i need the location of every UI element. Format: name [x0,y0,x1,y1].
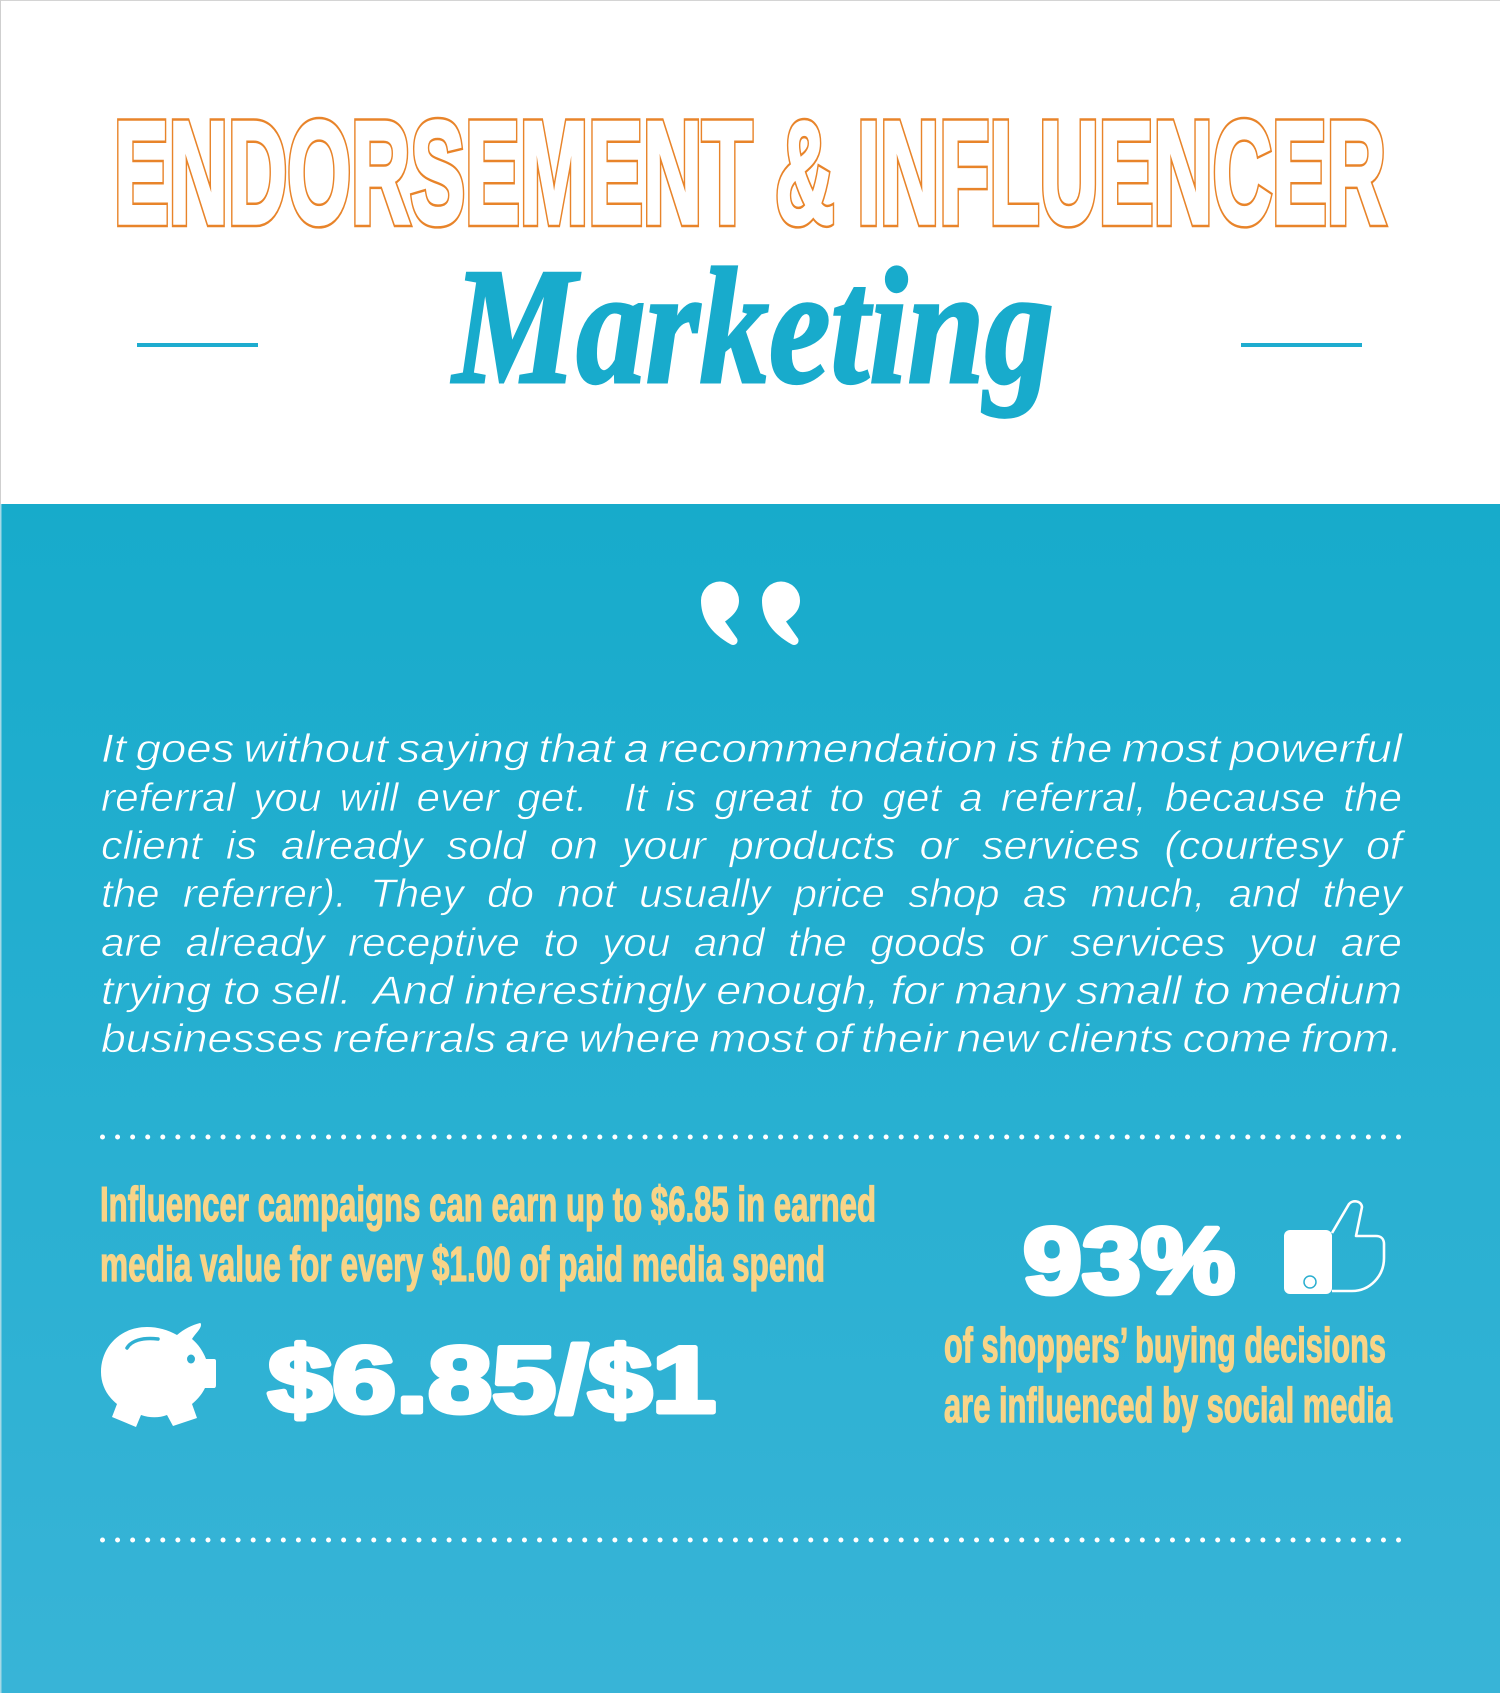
quote paragraph [101,727,1406,1061]
quote paragraph: businesses referrals are where most of their new clients come from. [101,1017,1402,1061]
heading: Marketing: Marketing [450,234,1054,418]
title header panel [114,91,1386,418]
stat description: Influencer campaigns can earn up to $6.85 in earned [100,1178,876,1232]
stat: shoppers influenced by social media [944,1201,1392,1433]
left accent line [137,343,258,347]
quote paragraph: trying to sell. And interestingly enough, for many small to medium [101,969,1402,1013]
stat description [944,1319,1392,1433]
quote paragraph: client is already sold on your products or services (courtesy of [101,824,1406,868]
quote paragraph: the referrer). They do not usually price shop as much, and they [101,872,1405,916]
quote paragraph: referral you will ever get. It is great to get a referral, because the [101,776,1402,820]
icon: piggy bank [101,1323,216,1427]
icon: thumbs up [1284,1201,1384,1294]
quote paragraph: are already receptive to you and the goods or services you are [101,921,1402,965]
quote paragraph: It goes without saying that a recommendation is the most powerful [101,727,1403,771]
right accent line [1241,343,1362,347]
big number $6.85/$1: $6.85/$1 [268,1327,716,1432]
stat description [100,1178,876,1292]
stat description: media value for every $1.00 of paid media spend [100,1238,825,1292]
blue content panel [0,504,1500,1693]
big number 93%: 93% [1023,1208,1235,1313]
icon: quotation marks [701,582,800,645]
stat: influencer earned media value [100,1178,876,1432]
